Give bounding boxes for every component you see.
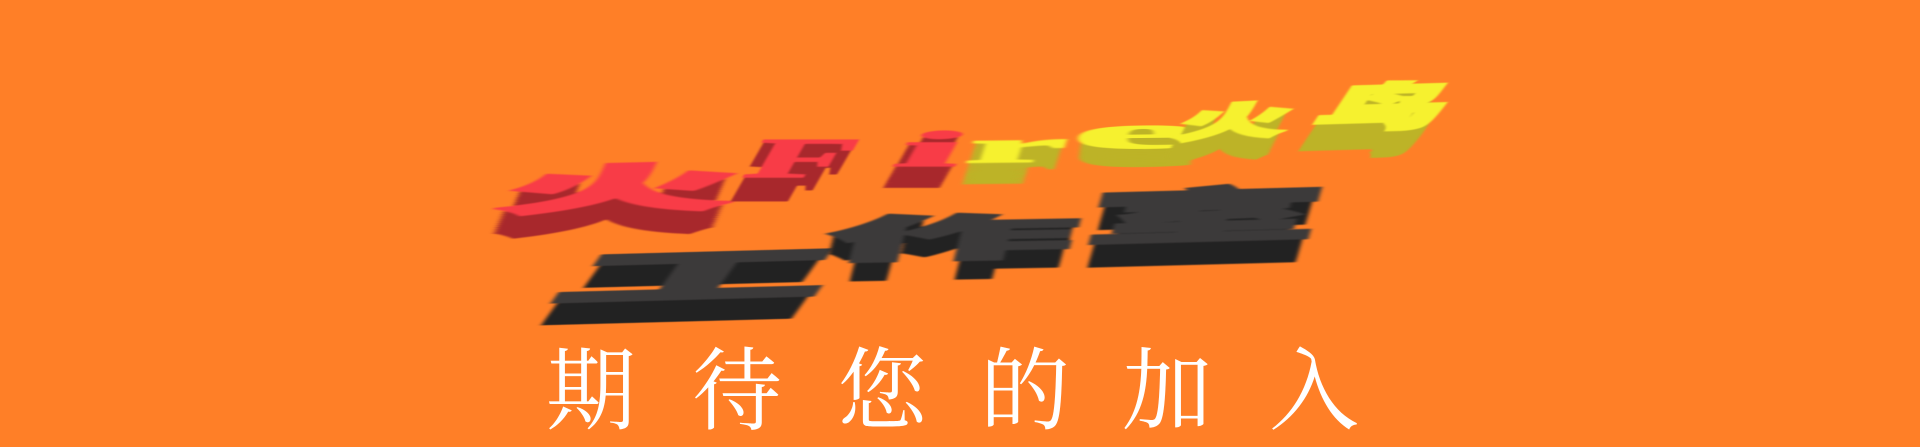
character 的: 的 [980,318,1070,447]
character 加: 加 [1122,318,1212,447]
black glyph: 作: 作 [819,197,1086,272]
yellow letter: r: r [960,120,1075,173]
tagline: 期待您的加入 [546,318,1359,447]
yellow glyph: 鸟: 鸟 [1299,65,1475,142]
character 入: 入 [1269,318,1359,447]
red letter: F: F [734,127,873,189]
red letter: i: i [884,121,982,177]
yellow letter: e: e [1069,106,1209,159]
3D logo line 2: black extruded wordmark 工作室 [536,167,1335,326]
3D logo line 1: red and yellow extruded wordmark [489,65,1475,240]
yellow glyph: 火: 火 [1165,88,1306,150]
red glyph: 火: 火 [489,145,756,225]
character 期: 期 [546,318,636,447]
character 您: 您 [837,318,927,447]
black glyph: 室: 室 [1078,167,1335,257]
character 待: 待 [692,318,782,447]
black glyph: 工: 工 [536,226,869,317]
